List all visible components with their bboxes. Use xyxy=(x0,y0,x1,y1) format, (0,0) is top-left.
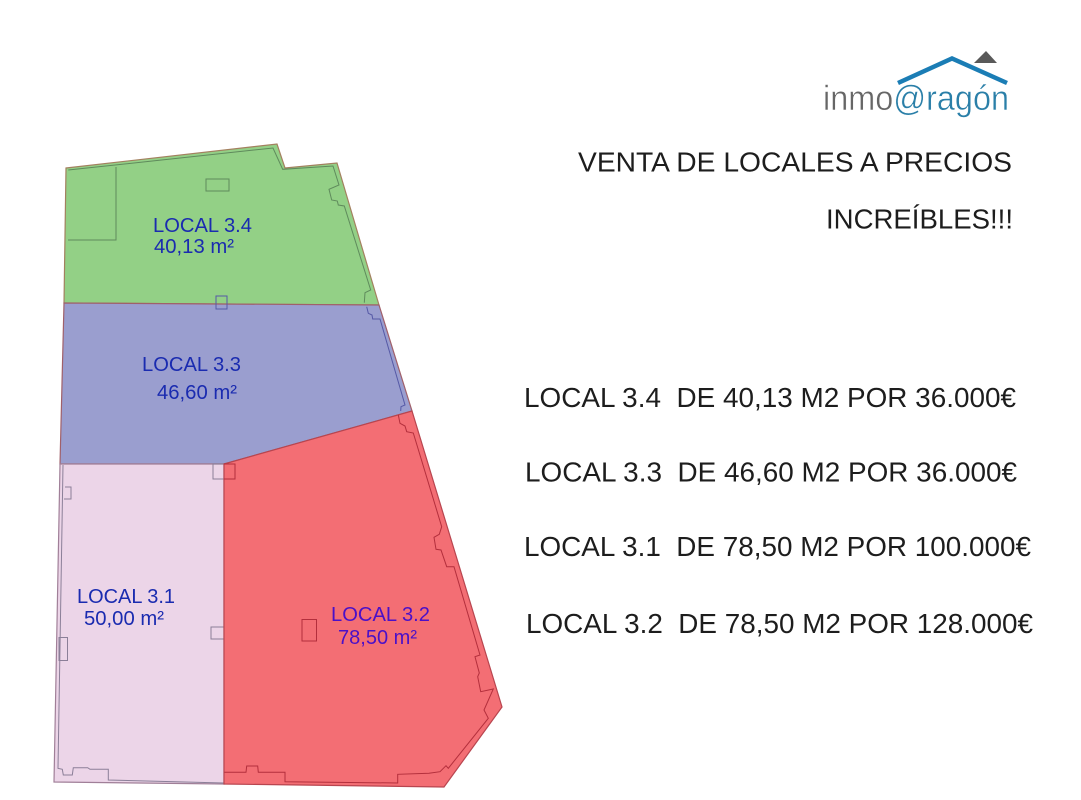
label: local 3.1: 50,00 m² xyxy=(84,607,164,630)
label: local 3.3: 46,60 m² xyxy=(157,381,237,404)
label: local 3.4: LOCAL 3.4 xyxy=(153,214,252,237)
icon: grey chimney triangle xyxy=(974,51,997,63)
label: local 3.2 xyxy=(331,603,430,649)
heading: INCREÍBLES!!! xyxy=(826,204,1013,234)
label: local 3.3 xyxy=(142,353,241,404)
price: local 3.1: LOCAL 3.1 DE 78,50 M2 POR 100.000€ xyxy=(524,531,1031,562)
panel: local 3.1 pink area xyxy=(54,464,224,784)
logo: inmo@ragón xyxy=(823,51,1009,118)
label: local 3.3: LOCAL 3.3 xyxy=(142,353,241,376)
label: local 3.2: LOCAL 3.2 xyxy=(331,603,430,626)
label: local 3.1 xyxy=(77,585,175,630)
panel: local 3.4 green area xyxy=(64,144,379,305)
price: local 3.3: LOCAL 3.3 DE 46,60 M2 POR 36.000€ xyxy=(525,456,1017,488)
price: local 3.2: LOCAL 3.2 DE 78,50 M2 POR 128.000€ xyxy=(526,608,1033,639)
heading: VENTA DE LOCALES A PRECIOS xyxy=(578,146,1012,178)
label: local 3.4: 40,13 m² xyxy=(154,235,234,258)
label: local 3.2: 78,50 m² xyxy=(338,626,417,649)
panel: local 3.2 red area xyxy=(224,411,502,787)
logo wordmark: inmo@ragón xyxy=(823,79,1009,118)
price list xyxy=(524,382,1033,639)
panel: local 3.3 blue area xyxy=(60,296,412,464)
label: local 3.4 xyxy=(153,214,252,258)
price: local 3.4: LOCAL 3.4 DE 40,13 M2 POR 36.000€ xyxy=(524,382,1016,413)
label: local 3.1: LOCAL 3.1 xyxy=(77,585,175,608)
floor plan xyxy=(54,144,502,787)
heading xyxy=(578,146,1013,234)
icon: roof xyxy=(898,58,1007,83)
